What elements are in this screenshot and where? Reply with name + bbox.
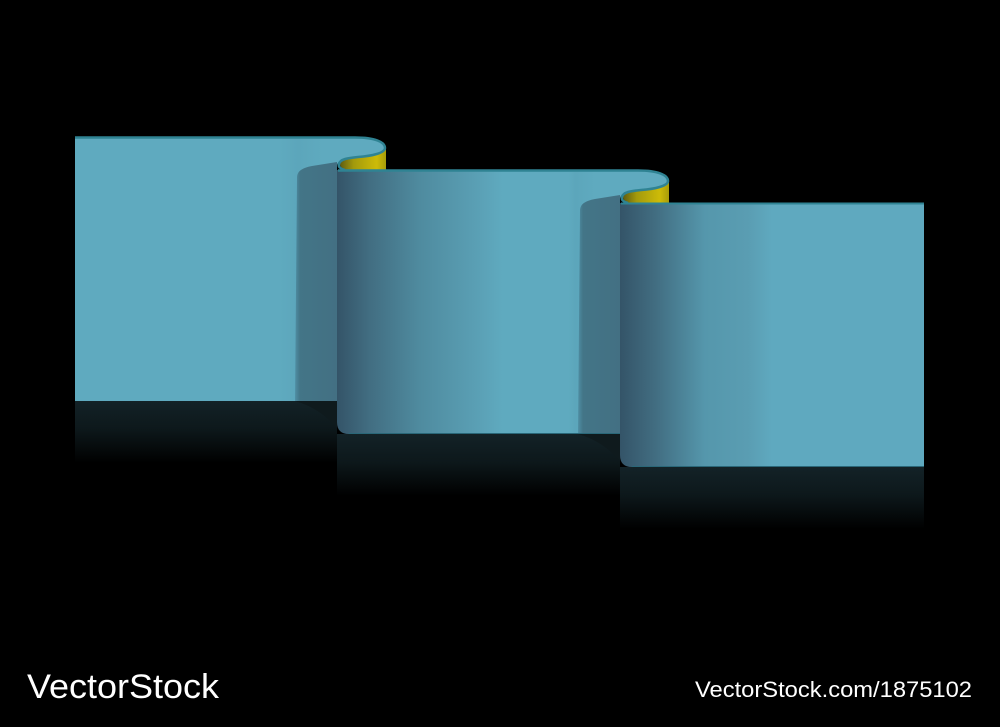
ribbon face	[620, 203, 924, 467]
panel: first ribbon section	[75, 137, 386, 401]
watermark url: VectorStock.com/1875102	[695, 677, 972, 702]
bottom edge	[349, 432, 620, 434]
fold shadow on floor: panel 1	[295, 401, 337, 428]
top edge and curl lip	[338, 170, 668, 203]
top edge and curl lip	[75, 138, 385, 170]
bottom edge	[632, 466, 924, 468]
ribbon face	[75, 137, 385, 401]
curl underside: yellow	[340, 146, 386, 170]
reflection: panel 2	[337, 434, 620, 496]
panel: third ribbon section	[620, 203, 924, 467]
fold shadow on floor: panel 2	[578, 434, 620, 461]
reflection: panel 3	[620, 467, 924, 529]
fold shadow	[295, 162, 337, 401]
reflection: panel 1	[75, 401, 337, 463]
fold shadow	[578, 195, 620, 434]
panel: second ribbon section	[337, 170, 669, 434]
watermark logo: VectorStock	[27, 668, 220, 706]
ribbon face	[337, 170, 668, 434]
curl underside: yellow	[623, 179, 669, 203]
top edge	[621, 202, 924, 204]
